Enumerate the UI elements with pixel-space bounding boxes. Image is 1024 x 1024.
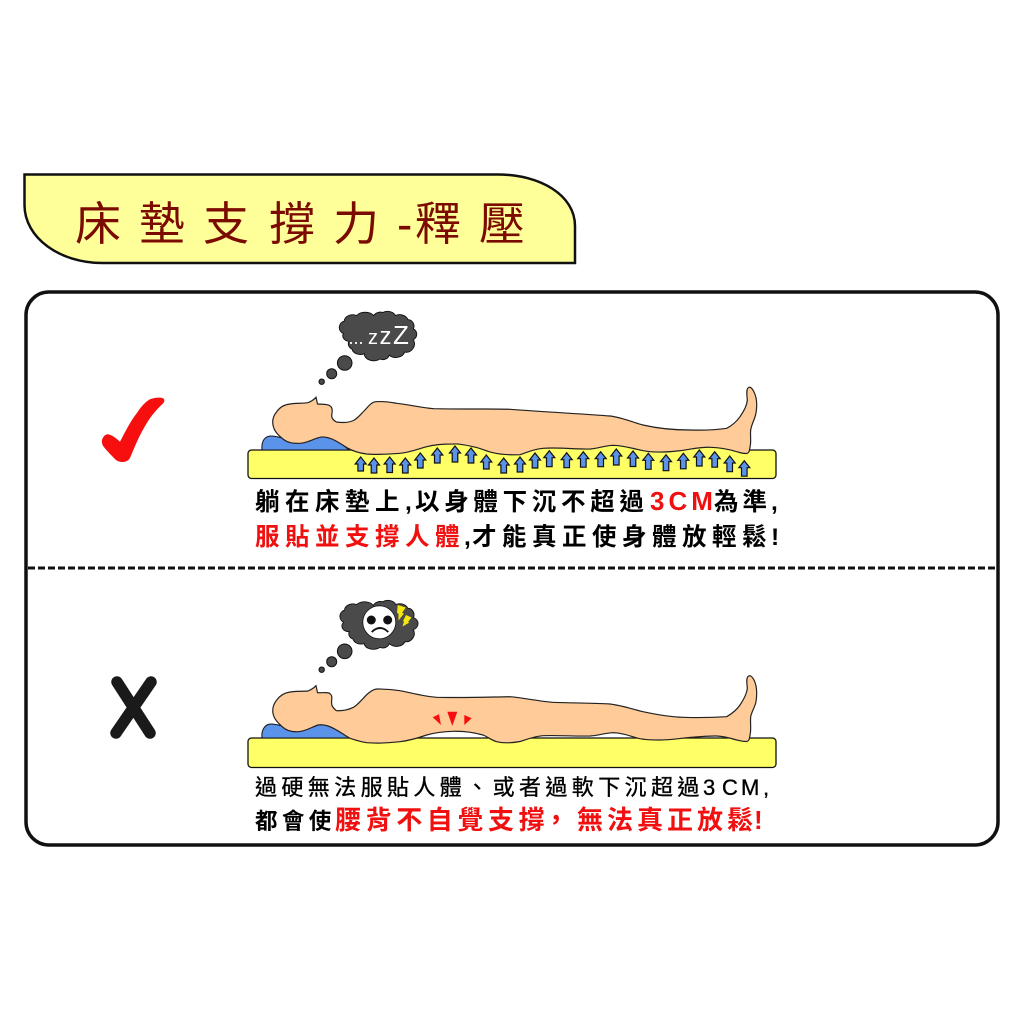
text block: incorrect support caption: 都會使 — [255, 809, 336, 834]
text block: incorrect support caption: 過硬無法服貼人體、或者過軟下沉超過 — [255, 775, 704, 800]
text block: correct support caption: ! — [771, 524, 785, 551]
text block: correct support caption: 3CM — [650, 486, 717, 516]
sleeping text: ... — [348, 328, 364, 348]
pillow — [262, 436, 349, 450]
text block: incorrect support caption: 3CM — [703, 775, 759, 800]
title banner — [24, 174, 575, 263]
sleeping text: z — [368, 327, 378, 349]
text block: correct support caption: , — [771, 489, 783, 516]
panel: incorrect support illustration — [248, 600, 776, 768]
main panel frame — [26, 292, 998, 845]
thought bubble: sleeping — [319, 311, 417, 384]
sleeping text: Z — [393, 320, 409, 350]
red pressure arrows — [433, 712, 472, 726]
icon: black X mark — [116, 682, 151, 733]
support arrows — [355, 446, 750, 476]
human body on supportive mattress — [273, 387, 757, 455]
text block: incorrect support caption: ! — [754, 805, 763, 835]
text block: correct support caption: , — [464, 524, 476, 551]
text block: correct support caption: 躺在床墊上 — [255, 488, 405, 516]
sad face — [363, 606, 396, 639]
lightning bolts — [397, 605, 412, 626]
text block: correct support caption: 為準 — [714, 488, 771, 516]
thought bubble: unhappy — [319, 600, 418, 672]
icon: red check mark — [102, 398, 164, 462]
sleeping text: z — [380, 323, 392, 350]
text block: incorrect support caption: ， — [543, 805, 569, 835]
text block: correct support caption: 服貼並支撐人體 — [255, 523, 465, 551]
title text: 床墊支撐力-釋壓 — [75, 198, 525, 250]
text block: incorrect support caption: , — [763, 775, 769, 800]
human body on unsupportive mattress — [273, 676, 757, 743]
text block: correct support caption — [255, 486, 785, 551]
pillow — [262, 724, 349, 738]
text block: correct support caption: 以身體下沉不超過 — [415, 488, 649, 516]
text block: incorrect support caption: 腰背不自覺支撐 — [335, 805, 549, 835]
panel: correct support illustration — [248, 311, 776, 478]
text block: incorrect support caption: 無法真正放鬆 — [577, 805, 757, 835]
mattress — [248, 443, 776, 478]
text block: correct support caption: , — [405, 489, 417, 516]
mattress — [248, 738, 776, 768]
text block: incorrect support caption — [255, 775, 769, 835]
text block: correct support caption: 才能真正使身體放輕鬆 — [472, 523, 772, 551]
